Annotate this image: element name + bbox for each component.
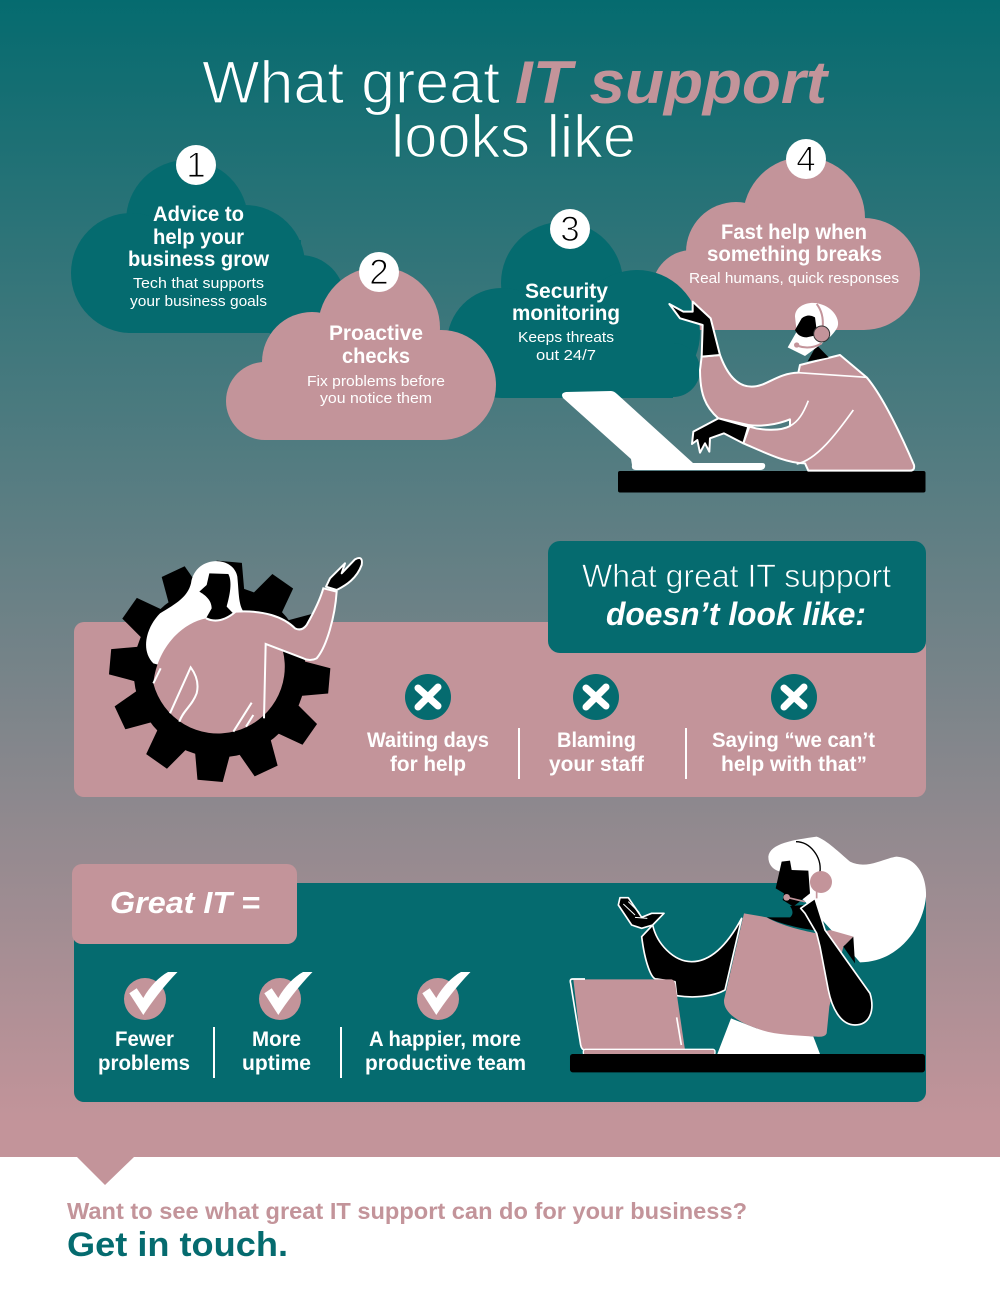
cloud 3: security: Keeps threats [518,329,614,346]
cloud 3: security: Security [525,280,608,303]
cloud 1: advice: Tech that supports [133,275,264,292]
cloud 3: security: out 24/7 [536,347,596,364]
gear [109,560,331,782]
cloud 3: security: monitoring [512,302,620,325]
illustration: woman in gear [109,558,362,782]
cloud 2: proactive: 2 [369,253,389,292]
laptop [573,979,685,1050]
check item: more uptime: uptime [242,1052,311,1075]
check item: happier team: A happier, more [369,1028,521,1051]
check item: fewer problems [98,972,190,1075]
cloud 4: fast help: Fast help when [721,221,867,244]
cloud 1: advice: your business goals [130,293,267,310]
x item: waiting [367,674,489,776]
x item: waiting: Waiting days [367,729,489,752]
cloud 2: proactive [226,252,496,440]
title [202,49,830,170]
heading box [72,864,297,944]
panel: great IT [72,864,926,1102]
cloud 2: proactive: you notice them [320,390,432,407]
left arm [642,918,742,997]
x item: saying: help with that” [721,753,867,776]
desk [570,1054,925,1072]
check item: happier team [365,972,526,1075]
cloud 1: advice: business grow [128,248,270,271]
cloud 4: fast help: something breaks [707,243,882,266]
face [776,861,810,907]
heading box: Great IT = [110,885,260,920]
call to action: Get in touch. [67,1226,288,1264]
right arm [801,898,872,1025]
cloud 1: advice: Advice to [153,203,244,226]
cloud 2: proactive: Fix problems before [307,373,445,390]
check item: fewer problems: problems [98,1052,190,1075]
title: looks like [391,103,636,170]
skirt [717,1018,820,1054]
cloud 3: security [447,209,700,398]
call to action [67,1198,747,1264]
check item: happier team: productive team [365,1052,526,1075]
panel: doesn't look like [74,541,926,797]
check item: fewer problems: Fewer [115,1028,174,1051]
illustration: man at laptop [562,302,926,492]
face [199,573,236,621]
x item: blaming [549,674,645,776]
callout pointer [77,1157,134,1185]
cloud 4: fast help: 4 [796,140,816,179]
neck [767,905,823,932]
hair [146,561,245,667]
illustration: woman with headset [570,837,926,1072]
hand [326,558,362,590]
cloud 1: advice: help your [153,226,244,249]
cloud 4: fast help [652,139,920,330]
heading box: doesn’t look like: [606,596,866,632]
check item: more uptime [242,972,312,1075]
call to action: Want to see what great IT support can do for your business? [67,1198,747,1224]
cloud 1: advice: 1 [186,146,206,185]
torso [153,588,337,733]
x item: blaming: your staff [549,753,645,776]
x item: saying: Saying “we can’t [712,729,875,752]
x item: waiting: for help [390,753,466,776]
laptop [562,391,765,470]
desk [618,471,926,492]
check item: more uptime: More [252,1028,301,1051]
cloud 4: fast help: Real humans, quick responses [689,270,899,287]
cloud 2: proactive: checks [342,345,410,368]
x item: blaming: Blaming [557,729,636,752]
title: What great [202,49,500,116]
headset [796,842,820,872]
cloud 3: security: 3 [560,210,580,249]
cloud 1: advice [71,145,345,345]
cloud 2: proactive: Proactive [329,322,423,345]
heading box: What great IT support [582,558,891,594]
heading box [548,541,926,653]
title: IT support [515,49,830,116]
torso [724,913,853,1037]
hair [768,837,926,962]
x item: saying [712,674,875,776]
